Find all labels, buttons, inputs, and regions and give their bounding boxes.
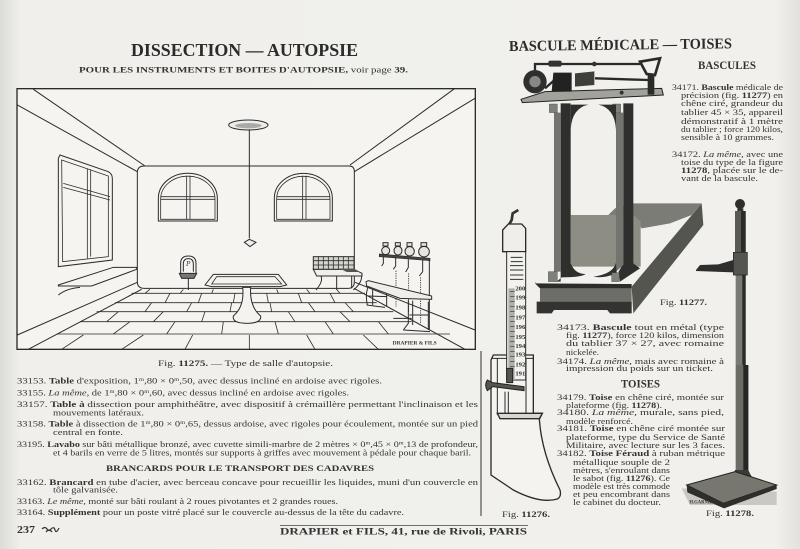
text block: 34173 and 34174: du tablier 37 × 27, avec romaine — [566, 338, 724, 348]
hook — [509, 210, 518, 224]
title: DISSECTION — AUTOPSIE — [131, 40, 358, 60]
panel: bascule médicale section — [486, 35, 784, 519]
right column — [619, 103, 640, 282]
text block: toises entries: modèle renforcé. — [566, 416, 633, 426]
text block: toises entries: Militaire, avec lecture sur les 3 faces. — [566, 440, 725, 450]
text block: 34172 — [672, 149, 783, 183]
dissection table — [205, 274, 287, 323]
illustration: fig. 11278 height gauge — [682, 199, 777, 508]
text block: 34171: tablier 45 × 35, appareil — [681, 107, 784, 117]
heading: brancards: BRANCARDS POUR LE TRANSPORT DES CADAVRES — [106, 464, 375, 473]
graduated column — [507, 252, 526, 380]
slider — [733, 252, 747, 275]
text block: 34171: sensible à 10 grammes. — [681, 132, 774, 142]
text block: toises entries: 34179. Toise en chêne ciré, montée sur — [557, 392, 724, 402]
text block: dissection tables: central en fonte. — [53, 427, 123, 437]
right arched window — [274, 173, 332, 221]
scale numbers: 200 — [515, 286, 526, 293]
text block: toises entries: 34180. La même, murale, sans pied, — [557, 407, 724, 417]
scale numbers: 191 — [515, 371, 525, 378]
text block: 34171: du tablier ; force 120 kilos, — [681, 124, 783, 134]
icon: ornament — [42, 528, 59, 532]
illustration: fig. 11277 scale — [521, 58, 703, 313]
scale numbers — [515, 286, 526, 378]
caption: fig. 11276: Fig. 11276. — [502, 509, 550, 519]
text block: 34171: chêne ciré, grandeur du — [681, 98, 784, 108]
scale numbers: 193 — [515, 352, 526, 359]
text block: 34171: précision (fig. 11277 ) en — [681, 90, 784, 100]
text block: 34171: démonstratif à 1 mètre — [681, 116, 783, 126]
scale numbers: 195 — [515, 334, 526, 341]
page number: 237 — [17, 525, 35, 536]
clamp — [486, 368, 524, 391]
text block: toises entries: métallique souple de 2 — [573, 457, 670, 467]
scale numbers: 196 — [515, 324, 526, 331]
left arched window — [158, 173, 217, 221]
text block: toises entries: mètres, s'enroulant dans — [573, 465, 671, 475]
sabot top bar — [497, 413, 542, 419]
illustration: autopsy room, fig. 11275 — [17, 88, 475, 349]
text block: toises entries: le cabinet du docteur. — [573, 497, 661, 507]
subheading: toises: TOISES — [621, 378, 660, 390]
text block: dissection tables: et 4 barils en verre de 5 litres, montés sur supports à griffes avec mouvement à pédale pour chaque baril. — [53, 448, 471, 458]
text block: dissection tables: 33158. Table à dissection de 1ᵐ,80 × 0ᵐ,65, dessus ardoise, avec rigoles pour écoulement, montée sur un pied — [17, 418, 479, 428]
text block: toises entries: le sabot (fig. 11276 ). Ce — [573, 473, 670, 483]
text block: stretchers — [17, 477, 479, 517]
text block: toises entries — [557, 392, 725, 507]
text block: dissection tables — [17, 376, 479, 458]
window sill — [58, 267, 137, 295]
left window — [58, 155, 112, 267]
text block: dissection tables: 33155. La même, de 1ᵐ,80 × 0ᵐ,60, avec dessus incliné en ardoise avec rigoles. — [17, 388, 349, 398]
platform side band — [632, 203, 703, 313]
text block: stretchers: 33163. Le même, monté sur bâti roulant à 2 roues pivotantes et 2 grandes roues. — [17, 496, 338, 506]
text block: dissection tables: 33157. Table à dissection pour amphithéâtre, avec dispositif à crémaillère permettant l'inclinaison et les — [17, 399, 479, 409]
arch spandrels — [571, 105, 616, 130]
text block: 34173 and 34174: impression du poids sur un ticket. — [566, 363, 713, 373]
footer: publisher address: DRAPIER et FILS, 41, rue de Rivoli, PARIS — [280, 528, 527, 538]
illustration: fig. 11276 tape measure — [486, 210, 560, 500]
wash basin with four bottles — [366, 243, 432, 332]
text block: 34172: vant de la bascule. — [681, 173, 758, 183]
gauge case — [503, 224, 526, 252]
tiled bench — [313, 257, 362, 290]
text block: 34173 and 34174: nickelée. — [566, 347, 599, 357]
text block: toises entries: et peu encombrant dans — [573, 489, 671, 499]
panel: dissection section — [17, 40, 479, 517]
text block: 34173 and 34174: fig. 11277 ), force 120 kilos, dimension — [566, 330, 725, 340]
text block: dissection tables: mouvements latéraux. — [53, 408, 144, 418]
arm — [696, 260, 733, 272]
heading: BASCULE MÉDICALE — TOISES — [509, 35, 732, 55]
text block: 34171: 34171. Bascule médicale de — [672, 82, 783, 92]
text block: 34171 — [672, 82, 784, 142]
left column — [557, 103, 586, 282]
text block: dissection tables: 33195. Lavabo sur bâti métallique bronzé, avec cuvette simili-marbre de 2 mètres × 0ᵐ,45 × 0ᵐ,13 de profondeur, — [17, 439, 478, 449]
rear panel — [571, 215, 641, 267]
text block: 34173 and 34174: 34174. La même, mais avec romaine à — [557, 356, 724, 366]
text block: 34173 and 34174: 34173. Bascule tout en métal (type — [557, 322, 724, 332]
text block: stretchers: tôle galvanisée. — [53, 484, 118, 494]
sabot blade — [491, 355, 560, 500]
base — [730, 470, 757, 482]
caption: fig. 11278: Fig. 11278. — [706, 508, 754, 518]
text block: toises entries: plateforme (fig. 11278 ). — [566, 400, 662, 410]
text block: toises entries: plateforme, type du Service de Santé — [566, 432, 725, 442]
ceiling lamp — [229, 120, 268, 247]
wall fountain — [179, 256, 197, 290]
scale numbers: 198 — [515, 305, 526, 312]
floor tiles — [57, 289, 450, 349]
text block: toises entries: 34182. Toise Féraud à ruban métrique — [557, 448, 725, 458]
scale numbers: 197 — [515, 315, 526, 322]
balance beam mechanism — [521, 58, 663, 103]
text block: 34173 and 34174 — [557, 322, 725, 373]
column divider — [480, 351, 482, 516]
back wall — [137, 166, 354, 288]
scale numbers: 192 — [515, 362, 526, 369]
text block: toises entries: 34181. Toise en chêne ciré montée sur — [557, 423, 725, 433]
engraver credit: DRAPIER & FILS — [393, 340, 437, 346]
graduated upright — [735, 211, 746, 252]
text block: 34172: 11278 , placée sur le de- — [681, 165, 783, 175]
text block: stretchers: 33162. Brancard en tube d'acier, avec berceau concave pour recueillir les liquides, muni d'un couvercle en — [17, 477, 479, 487]
caption: fig. 11277: Fig. 11277. — [660, 297, 707, 307]
scale numbers: 194 — [515, 343, 526, 350]
text block: toises entries: modèle est très commode — [573, 481, 670, 491]
caption: fig. 11275: Fig. 11275. — Type de salle d'autopsie. — [158, 358, 333, 368]
subheading: bascules: BASCULES — [698, 60, 756, 72]
illustration: fig. 11278 height gauge: H.GARNIER — [689, 500, 717, 505]
subtitle: POUR LES INSTRUMENTS ET BOITES D'AUTOPSIE, voir page 39. — [79, 66, 408, 74]
base — [540, 288, 632, 302]
wall fountain: P — [185, 259, 191, 268]
scale numbers: 199 — [515, 294, 526, 301]
text block: 34172: 34172. La même, avec une — [672, 149, 783, 159]
text block: 34172: toise du type de la figure — [681, 157, 783, 167]
text block: stretchers: 33164. Supplément pour un poste vitré placé sur le couvercle au-dessus de la tête du cadavre. — [17, 507, 404, 517]
text block: dissection tables: 33153. Table d'exposition, 1ᵐ,80 × 0ᵐ,50, avec dessus incliné en ardoise avec rigoles. — [17, 376, 382, 386]
platform grey top — [608, 203, 702, 228]
